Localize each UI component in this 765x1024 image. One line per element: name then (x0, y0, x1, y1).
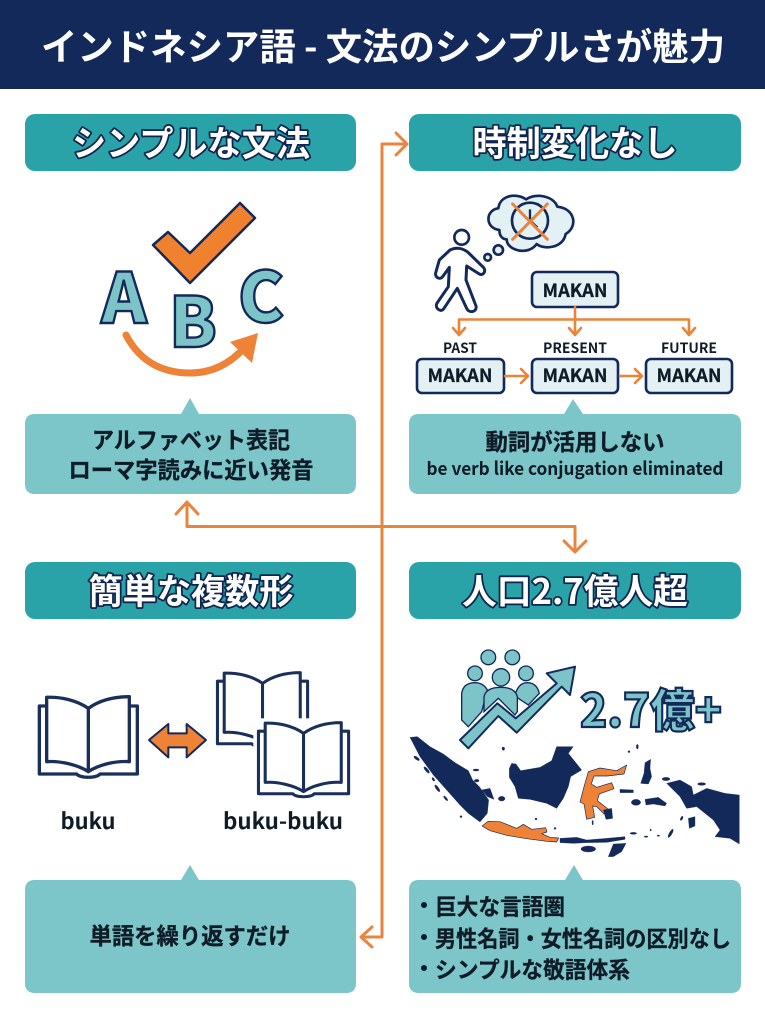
panel: simple grammar (25, 114, 356, 494)
heading: simple plurals (25, 562, 356, 619)
callout: language sphere points (409, 865, 741, 993)
diagram: MAKAN stays the same across tenses: MAKAN (542, 362, 608, 388)
icon: single book (39, 697, 137, 777)
icon: check mark and ABC letters: C (238, 242, 284, 342)
callout: alphabet notation (25, 398, 356, 494)
panel: simple plurals (25, 562, 356, 993)
label: buku: buku (60, 804, 116, 836)
icon: check mark and ABC letters (100, 203, 284, 373)
diagram: MAKAN stays the same across tenses: PRESENT (543, 338, 607, 358)
callout: alphabet notation: ローマ字読みに近い発音 (68, 451, 314, 485)
heading: no tense change: 時制変化なし (472, 116, 678, 167)
icon: double-headed arrow (149, 724, 206, 757)
callout: verbs do not conjugate: be verb like conjugation eliminated (426, 455, 724, 481)
heading: population (409, 562, 741, 619)
callout: verbs do not conjugate: 動詞が活用しない (486, 423, 664, 457)
diagram: MAKAN stays the same across tenses: MAKAN (656, 362, 722, 388)
panel: population over 270 million (409, 562, 741, 993)
callout: language sphere points: 巨大な言語圏 (435, 890, 565, 922)
map: Indonesia (410, 737, 739, 857)
heading: population: 人口2.7億人超 (462, 564, 688, 615)
callout: just repeat the word (25, 865, 356, 993)
heading: simple grammar: シンプルな文法 (72, 116, 310, 167)
diagram: MAKAN stays the same across tenses: PAST (443, 338, 477, 358)
connector arrows between panels (176, 133, 586, 947)
callout: language sphere points: シンプルな敬語体系 (435, 953, 630, 985)
callout: verbs do not conjugate (409, 399, 741, 494)
panel: no tense change (409, 114, 741, 494)
diagram: MAKAN stays the same across tenses (417, 272, 732, 393)
callout: alphabet notation: アルファベット表記 (92, 421, 290, 455)
callout: just repeat the word: 単語を繰り返すだけ (90, 917, 290, 951)
icon: walking person with crossed-out clock thought (436, 196, 573, 312)
callout: language sphere points: 男性名詞・女性名詞の区別なし (435, 922, 731, 954)
label: buku-buku: buku-buku (223, 804, 343, 836)
icon: check mark and ABC letters: B (169, 267, 217, 367)
icon: people with rising arrow (460, 650, 575, 748)
diagram: MAKAN stays the same across tenses: FUTURE (661, 338, 717, 358)
stat: 270 million plus: 2.7億+ (580, 675, 722, 741)
title banner: インドネシア語 - 文法のシンプルさが魅力 (41, 17, 725, 71)
icon: two books (217, 673, 353, 798)
diagram: MAKAN stays the same across tenses: MAKAN (542, 277, 608, 303)
title banner (0, 0, 765, 89)
icon: check mark and ABC letters: A (100, 243, 148, 343)
diagram: MAKAN stays the same across tenses: MAKAN (428, 362, 492, 388)
heading: simple plurals: 簡単な複数形 (88, 564, 294, 615)
heading: no tense change (409, 114, 741, 171)
heading: simple grammar (25, 114, 356, 171)
